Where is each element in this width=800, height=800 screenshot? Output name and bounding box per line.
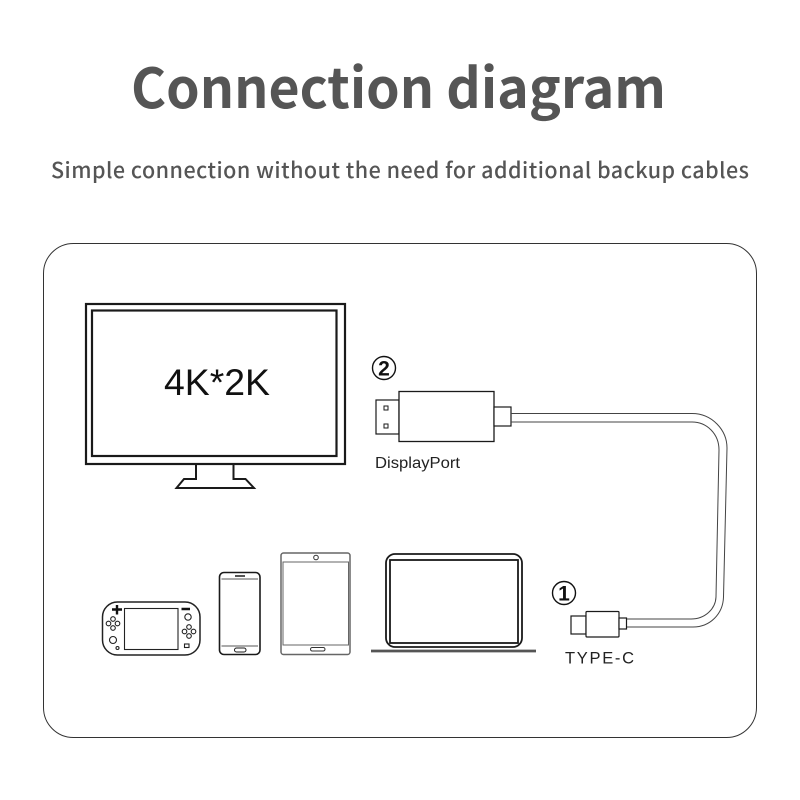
TYPE-C label: TYPE-C	[565, 650, 634, 668]
monitor label: 4K*2K: 4K*2K	[164, 362, 270, 403]
icon: handheld console	[102, 602, 200, 655]
icon: tablet	[281, 553, 350, 654]
DisplayPort connector	[376, 392, 511, 442]
number badge 1: 1	[558, 582, 570, 606]
number badge 1	[552, 582, 576, 606]
cable	[511, 414, 727, 627]
title: Connection diagram	[131, 44, 666, 124]
DisplayPort label: DisplayPort	[375, 455, 461, 472]
icon: phone	[220, 572, 260, 654]
icon: monitor	[86, 304, 345, 488]
panel: diagram frame	[44, 244, 756, 738]
subtitle: Simple connection without the need for additional backup cables	[51, 154, 749, 185]
number badge 2	[372, 356, 396, 380]
number badge 2: 2	[378, 358, 390, 380]
TYPE-C connector	[571, 612, 626, 637]
icon: laptop	[371, 554, 536, 651]
